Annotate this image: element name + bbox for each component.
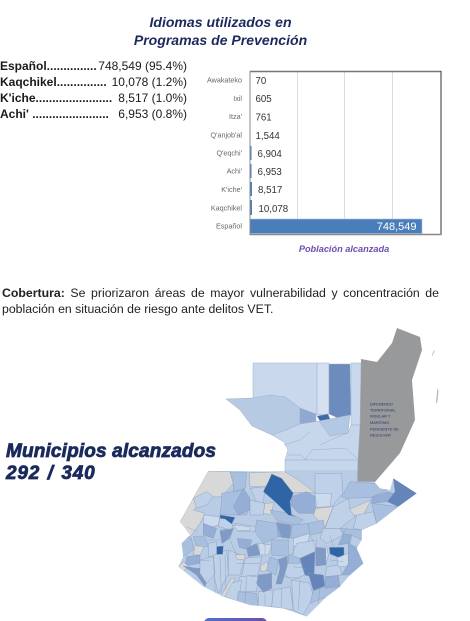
value labels: 605 [256, 94, 272, 105]
value labels: 748,549 [377, 221, 416, 233]
language totals list: 8,517 (1.0%) [118, 91, 187, 105]
value labels: 761 [256, 112, 272, 124]
coverage paragraph: Cobertura: Se priorizaron áreas de mayor vulnerabilidad y concentración de población en situación de riesgo ante delitos VET. [2, 286, 439, 316]
category labels: Q'eqchi' [216, 148, 243, 158]
category labels: Ixil [233, 94, 242, 103]
map: Petén region [226, 363, 361, 483]
frame [250, 71, 441, 235]
medium dark municipalities [387, 478, 417, 507]
territory note: RESOLVER [370, 432, 391, 438]
category labels: Awakateko [207, 76, 242, 84]
map of municipalities [178, 328, 438, 621]
bar chart: population by language [207, 70, 442, 254]
value labels: 6,904 [258, 149, 282, 160]
language totals list: Achi' ....................... [0, 107, 109, 121]
language totals list: 10,078 (1.2%) [112, 75, 187, 89]
language totals list: K'iche....................... [0, 91, 112, 105]
title: Programas de Prevención [134, 32, 307, 48]
category labels [207, 76, 243, 230]
extra boundary lines [187, 527, 347, 610]
territory note: TERRITORIAL [370, 408, 396, 412]
value labels: 10,078 [258, 204, 288, 215]
value labels: 1,544 [256, 131, 280, 142]
municipalities mesh [178, 471, 417, 615]
high coverage municipalities [263, 474, 295, 517]
territory note: DIFERENDO [370, 402, 393, 406]
territory note: INSULAR Y [370, 414, 391, 418]
title [134, 14, 307, 48]
category labels: Achi' [227, 167, 243, 176]
language totals list [0, 59, 187, 121]
municipalities reached callout [5, 441, 216, 484]
category labels: Itza' [229, 112, 243, 121]
language totals list: Kaqchikel............... [0, 75, 107, 89]
value labels: 8,517 [258, 185, 282, 196]
value labels: 70 [256, 76, 267, 87]
territory note: PENDIENTE DE [370, 426, 399, 432]
territory note: MARÍTIMO [370, 420, 389, 425]
map: Belize disputed territory [357, 328, 438, 482]
value labels [256, 76, 416, 233]
axis title: Población alcanzada [299, 244, 389, 254]
value labels: 6,953 [258, 167, 282, 178]
category labels: Q'anjob'al [210, 130, 242, 139]
municipalities reached callout: Municipios alcanzados [6, 441, 216, 462]
bars [250, 146, 422, 234]
category labels: Kaqchikel [211, 203, 242, 212]
municipalities reached callout: 292 / 340 [6, 463, 95, 484]
territory note [370, 402, 399, 438]
map: southern departments [170, 470, 423, 620]
language totals list: 748,549 (95.4%) [98, 59, 187, 73]
pill tab at bottom [204, 618, 267, 621]
category labels: K'iche' [221, 185, 243, 194]
language totals list: Español............... [0, 59, 97, 73]
title: Idiomas utilizados en [149, 14, 292, 30]
category labels: Español [216, 222, 242, 230]
language totals list: 6,953 (0.8%) [118, 107, 187, 121]
